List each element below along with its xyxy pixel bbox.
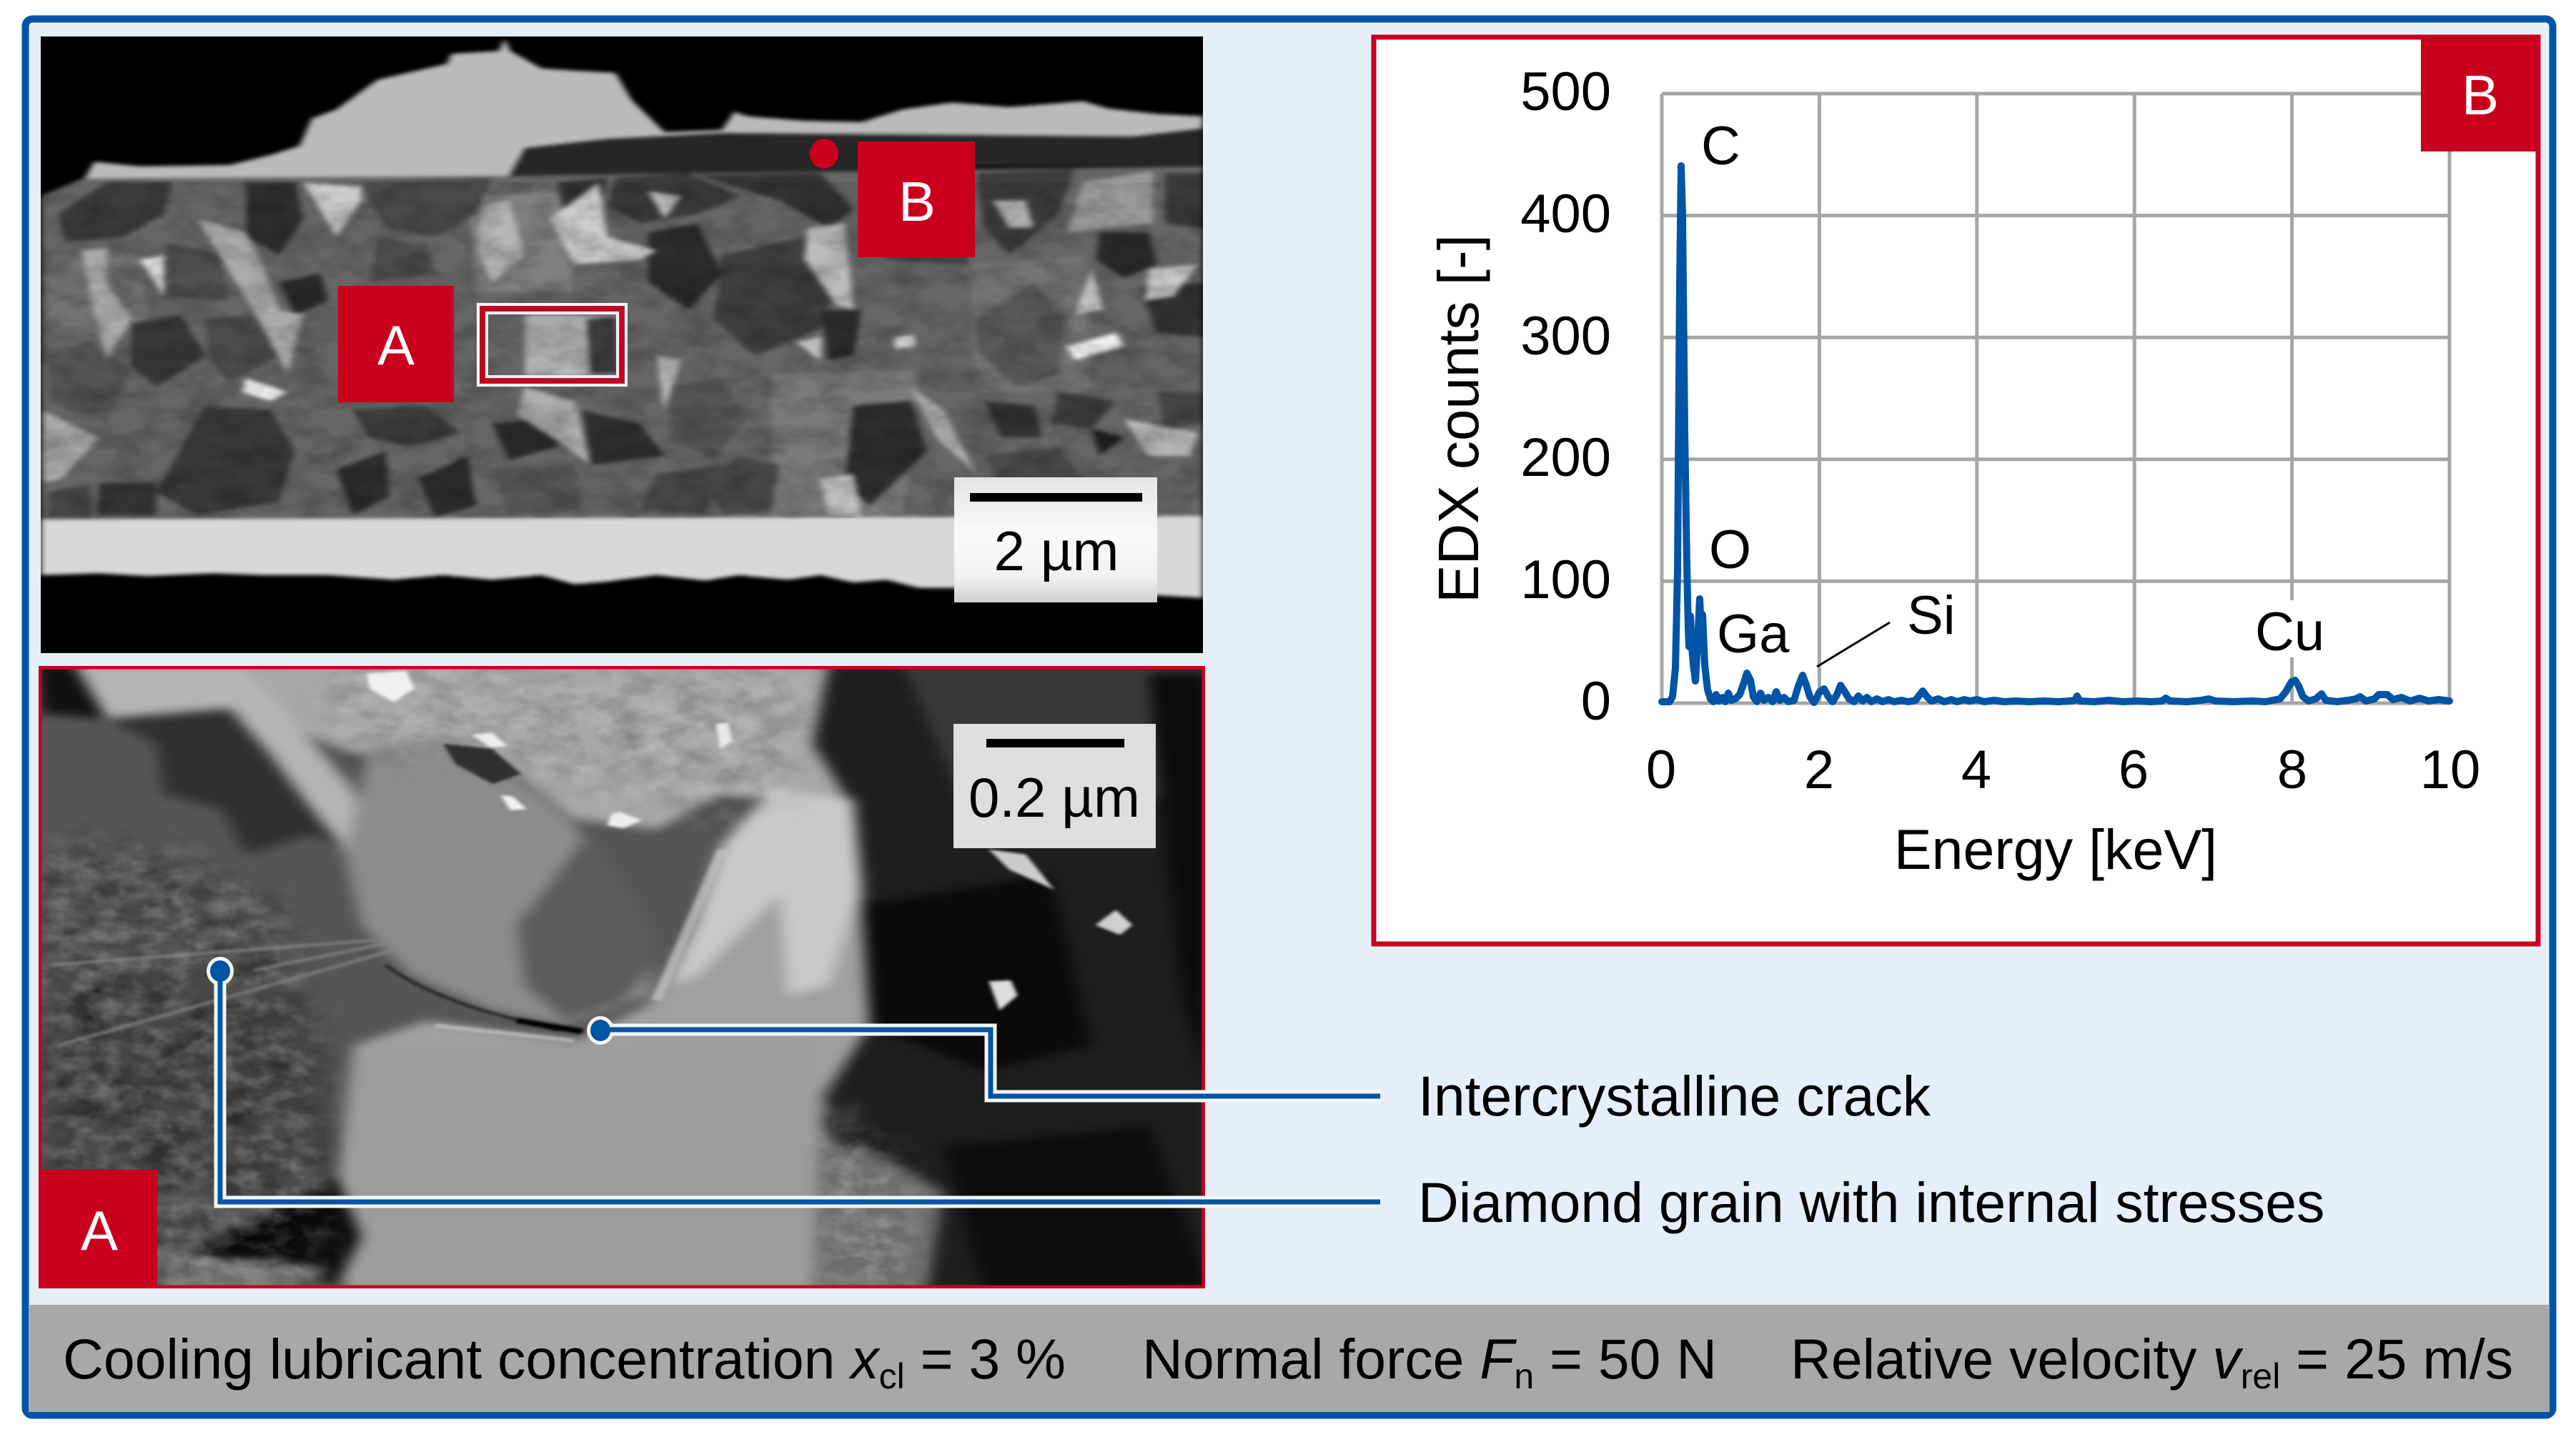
leader: intercrystalline crack: [587, 1016, 1380, 1096]
parameter bar: [29, 1305, 2550, 1412]
badge: A: [338, 286, 454, 402]
Si leader line: [1817, 622, 1890, 667]
x axis labels: 6: [2119, 740, 2149, 800]
label: diamond grain: Diamond grain with internal stresses: [1418, 1171, 2324, 1234]
badge: A detail: [36, 1170, 157, 1291]
parameter: cooling lubricant concentration: Cooling lubricant concentration x: [63, 1328, 879, 1391]
badge: A: A: [377, 314, 415, 377]
badge: B: B: [898, 170, 936, 233]
red locator dot: [810, 139, 838, 169]
y axis labels: 100: [1520, 550, 1611, 610]
grain texture: [41, 182, 1203, 518]
EDX series: [1662, 166, 2449, 702]
y axis labels: 300: [1520, 306, 1611, 367]
y axis labels: 200: [1520, 427, 1611, 488]
dark deposition band: [509, 129, 1203, 176]
peak label: C: C: [1701, 116, 1740, 176]
y axis labels: 0: [1581, 671, 1611, 732]
badge: B spectrum: [2421, 35, 2540, 151]
panel: EDX spectrum: [1374, 35, 2540, 944]
x axis labels: 0: [1646, 740, 1676, 800]
parameter: relative velocity: = 25 m/s: [2280, 1328, 2513, 1391]
parameter: normal force: = 50 N: [1534, 1328, 1717, 1391]
micrograph texture left: [41, 837, 342, 1285]
label: intercrystalline crack: Intercrystalline crack: [1418, 1065, 1931, 1128]
parameter: normal force: n: [1514, 1356, 1534, 1396]
badge: A detail: A: [81, 1199, 118, 1262]
x axis labels: 4: [1961, 740, 1991, 800]
scale bar: 0.2 µm: 0.2 µm: [969, 766, 1140, 829]
speckled top grain: [286, 666, 815, 837]
platinum layer: [84, 39, 1203, 179]
parameter: relative velocity: Relative velocity v: [1790, 1328, 2241, 1391]
x axis labels: [1646, 740, 2480, 800]
y axis labels: 500: [1520, 61, 1611, 122]
parameter: cooling lubricant concentration: cl: [879, 1356, 905, 1396]
leader: diamond grain: [207, 957, 1380, 1202]
peak label: Cu: Cu: [2255, 602, 2324, 662]
x axis title: Energy [keV]: [1894, 817, 2217, 881]
scale bar: 0.2 µm: [953, 724, 1156, 848]
scale bar: 2 µm: 2 µm: [994, 519, 1119, 582]
panel: overview SEM micrograph: [41, 36, 1203, 653]
y axis labels: [1520, 61, 1611, 732]
badge: B: [858, 141, 975, 257]
polycrystalline diamond layer: [41, 166, 1203, 522]
y axis labels: 400: [1520, 184, 1611, 244]
panel A border: [39, 666, 1205, 1288]
substrate band: [41, 516, 1203, 598]
badge: B spectrum: B: [2462, 64, 2499, 126]
x axis labels: 8: [2277, 740, 2307, 800]
parameter: cooling lubricant concentration: = 3 %: [905, 1328, 1066, 1391]
scale bar: 2 µm: [954, 477, 1157, 602]
peak label: Ga: Ga: [1717, 604, 1790, 665]
y axis title: EDX counts [-]: [1427, 234, 1490, 603]
peak label: Si: Si: [1907, 585, 1956, 646]
x axis labels: 10: [2420, 740, 2480, 800]
parameter: normal force: Normal force F: [1142, 1328, 1514, 1391]
parameter: relative velocity: rel: [2241, 1356, 2280, 1396]
x axis labels: 2: [1804, 740, 1834, 800]
lower right speckle: [808, 1072, 929, 1288]
inset marker for region A: [478, 304, 626, 385]
peak label: O: O: [1709, 519, 1751, 580]
chart grid: [1662, 94, 2449, 703]
